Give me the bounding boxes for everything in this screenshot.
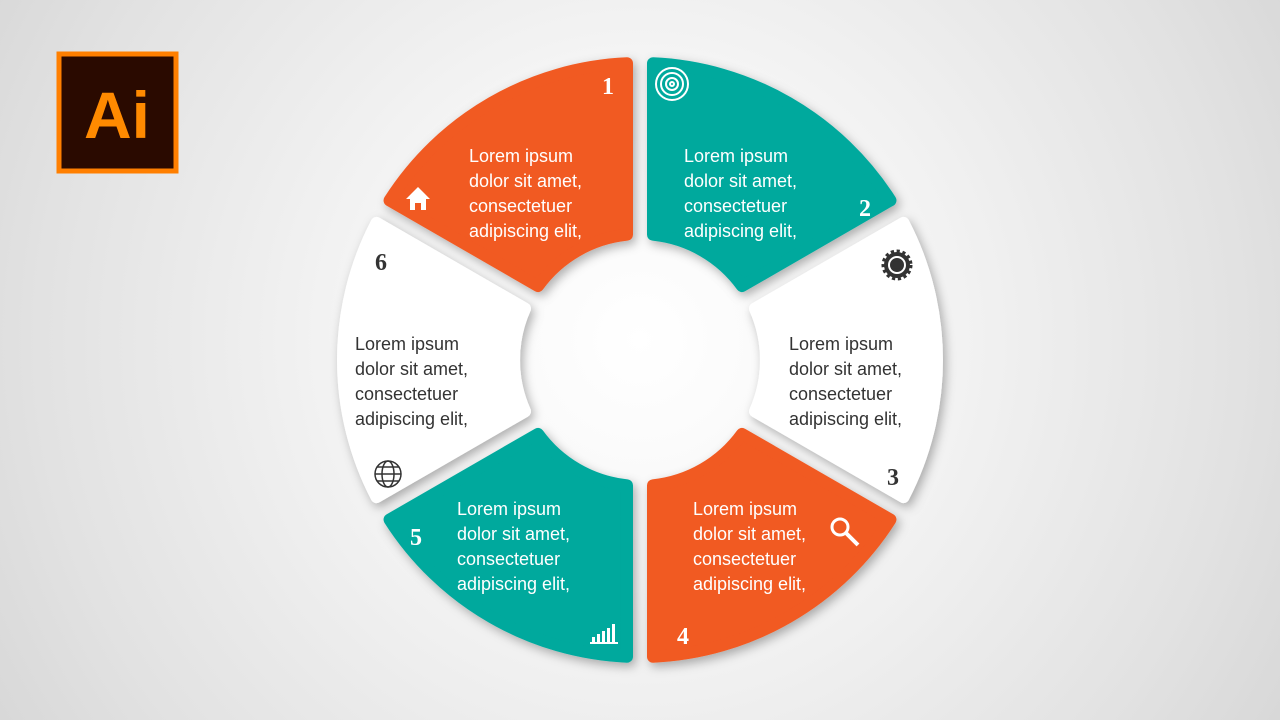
text: segment 1: dolor sit amet, [469, 171, 582, 191]
text: segment 6: Lorem ipsum [355, 334, 459, 354]
text: segment 5: consectetuer [457, 549, 560, 569]
text: segment 4: adipiscing elit, [693, 574, 806, 594]
text: segment 3: adipiscing elit, [789, 409, 902, 429]
logo: Adobe Illustrator: Ai [84, 78, 150, 152]
numbers: 2 [859, 196, 871, 222]
segment 6 white [258, 223, 569, 540]
icon: bar chart [590, 624, 618, 644]
text: segment 4: dolor sit amet, [693, 524, 806, 544]
text: segment 4: consectetuer [693, 549, 796, 569]
icon: magnifier [832, 519, 858, 545]
numbers: 4 [677, 624, 689, 650]
numbers [375, 74, 899, 650]
icon: gear [884, 252, 910, 278]
text: segment 3: Lorem ipsum [789, 334, 893, 354]
text: segment 2: dolor sit amet, [684, 171, 797, 191]
text: segment 3: consectetuer [789, 384, 892, 404]
text: segment 1: Lorem ipsum [469, 146, 573, 166]
text: segment 5: adipiscing elit, [457, 574, 570, 594]
text: segment 4: Lorem ipsum [693, 499, 797, 519]
segment 5 teal [390, 408, 701, 720]
segment 4 orange [653, 434, 890, 657]
numbers: 1 [602, 74, 614, 100]
text: segment 6: dolor sit amet, [355, 359, 468, 379]
segment 3 white [711, 180, 1022, 497]
ring of six segments [258, 0, 1022, 720]
icon: globe [375, 461, 401, 487]
text: segment 1: consectetuer [469, 196, 572, 216]
text: segment 2: adipiscing elit, [684, 221, 797, 241]
logo: Adobe Illustrator [59, 54, 176, 171]
text: segment 1: adipiscing elit, [469, 221, 582, 241]
icon: target [656, 68, 688, 100]
segment 2 teal [579, 0, 890, 312]
text: segment 2: Lorem ipsum [684, 146, 788, 166]
text: segment 3: dolor sit amet, [789, 359, 902, 379]
numbers: 3 [887, 465, 899, 491]
segment 1 orange [390, 63, 627, 286]
numbers: 5 [410, 525, 422, 551]
text: segment 6: consectetuer [355, 384, 458, 404]
text: segment 2: consectetuer [684, 196, 787, 216]
numbers: 6 [375, 250, 387, 276]
icon: home [406, 187, 430, 210]
text: segment 6: adipiscing elit, [355, 409, 468, 429]
text: segment 5: dolor sit amet, [457, 524, 570, 544]
text: segment 5: Lorem ipsum [457, 499, 561, 519]
